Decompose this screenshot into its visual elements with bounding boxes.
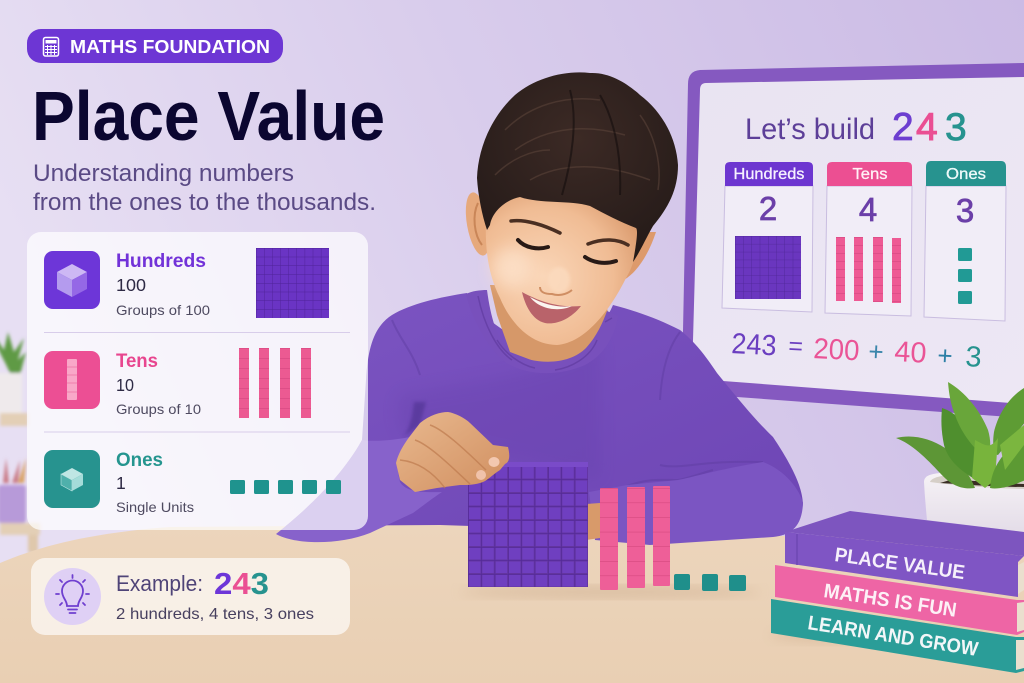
board column: ones [924,161,1006,321]
row: ones: Ones [116,450,163,471]
board column: hundreds: Hundreds [734,166,805,183]
tens rods [239,348,311,418]
purple book [785,511,1024,597]
board title: 3 [945,106,967,149]
board title: Let’s build [745,113,875,146]
icon: light bulb [44,568,101,625]
smile [522,292,581,323]
badge: maths foundation: MATHS FOUNDATION [70,37,270,57]
pink book: MATHS IS FUN [822,580,958,622]
hair [477,72,678,262]
neck [490,285,608,366]
sweater shading [398,340,600,480]
desk [0,525,1024,683]
subtitle [33,160,376,216]
whiteboard [682,63,1024,418]
eyes and brows [511,221,628,263]
sweater collar [466,290,618,373]
board column: ones: Ones [946,166,986,183]
row: tens: Tens [116,351,158,372]
row: hundreds: 100 [116,275,146,295]
white pot [924,473,1024,532]
row: tens: 10 [116,375,134,395]
leaves [896,382,1024,488]
whiteboard surface [692,77,1024,404]
row: ones [44,450,341,515]
sweater folds [392,320,770,505]
sleeves on the desk [276,437,803,545]
ears [462,191,656,280]
board equation: 200 [813,333,860,367]
ones cubes [230,480,341,494]
teal book [771,599,1024,673]
board column: tens: 4 [859,191,877,228]
row: hundreds [44,248,329,318]
badge: maths foundation [27,29,283,63]
board column: hundreds [722,162,813,312]
board column: ones: 3 [956,192,974,229]
subtitle: Understanding numbers [33,160,294,187]
board column: hundreds: 2 [759,190,777,227]
example number: 243 [214,566,269,601]
icon: calculator [44,38,58,56]
board title: 2 [892,106,914,149]
whiteboard frame [682,63,1024,418]
stack of books [770,511,1024,673]
panel: place value key [27,232,368,530]
board equation [731,328,982,374]
nose [540,267,572,295]
board equation: 40 [894,336,927,370]
potted plant [896,382,1024,532]
board title [745,106,967,149]
far hand behind block [586,503,600,540]
cheek highlight [492,248,532,288]
background shelf with plant and pencil cup [0,332,40,553]
panel: example: Example: [116,571,203,596]
boy [276,72,803,545]
panel: example: 2 hundreds, 4 tens, 3 ones [116,606,314,623]
pink book [775,565,1024,635]
title: Place Value [32,77,385,155]
block shadows on desk [460,586,760,598]
board equation: + [868,336,884,367]
collar ribbing [478,296,612,370]
board equation: = [788,332,804,361]
face [486,193,638,345]
sweater body [276,293,803,545]
subtitle: from the ones to the thousands. [33,189,376,216]
hundreds grid [256,248,329,318]
row: tens [44,348,311,418]
ten bars [600,486,670,590]
purple book: PLACE VALUE [833,544,966,584]
row: hundreds: Groups of 100 [116,302,210,318]
teal book: LEARN AND GROW [806,612,980,661]
icon: hundreds cube [44,251,100,309]
icon: ones cube [44,450,100,508]
hand [396,412,509,492]
board column: tens: Tens [852,166,888,183]
board equation: 3 [965,341,982,374]
board column: tens [825,162,912,316]
panel: example [31,558,350,635]
row: ones: Single Units [116,499,194,515]
hundred block [468,462,588,587]
row: hundreds: Hundreds [116,251,206,272]
icon: tens rod [44,351,100,409]
board equation: + [937,340,953,371]
board title: 4 [916,106,938,149]
unit cubes [674,574,746,591]
board equation: 243 [731,328,777,362]
row: tens: Groups of 10 [116,401,201,417]
book shadow [770,627,990,643]
row: ones: 1 [116,473,126,493]
